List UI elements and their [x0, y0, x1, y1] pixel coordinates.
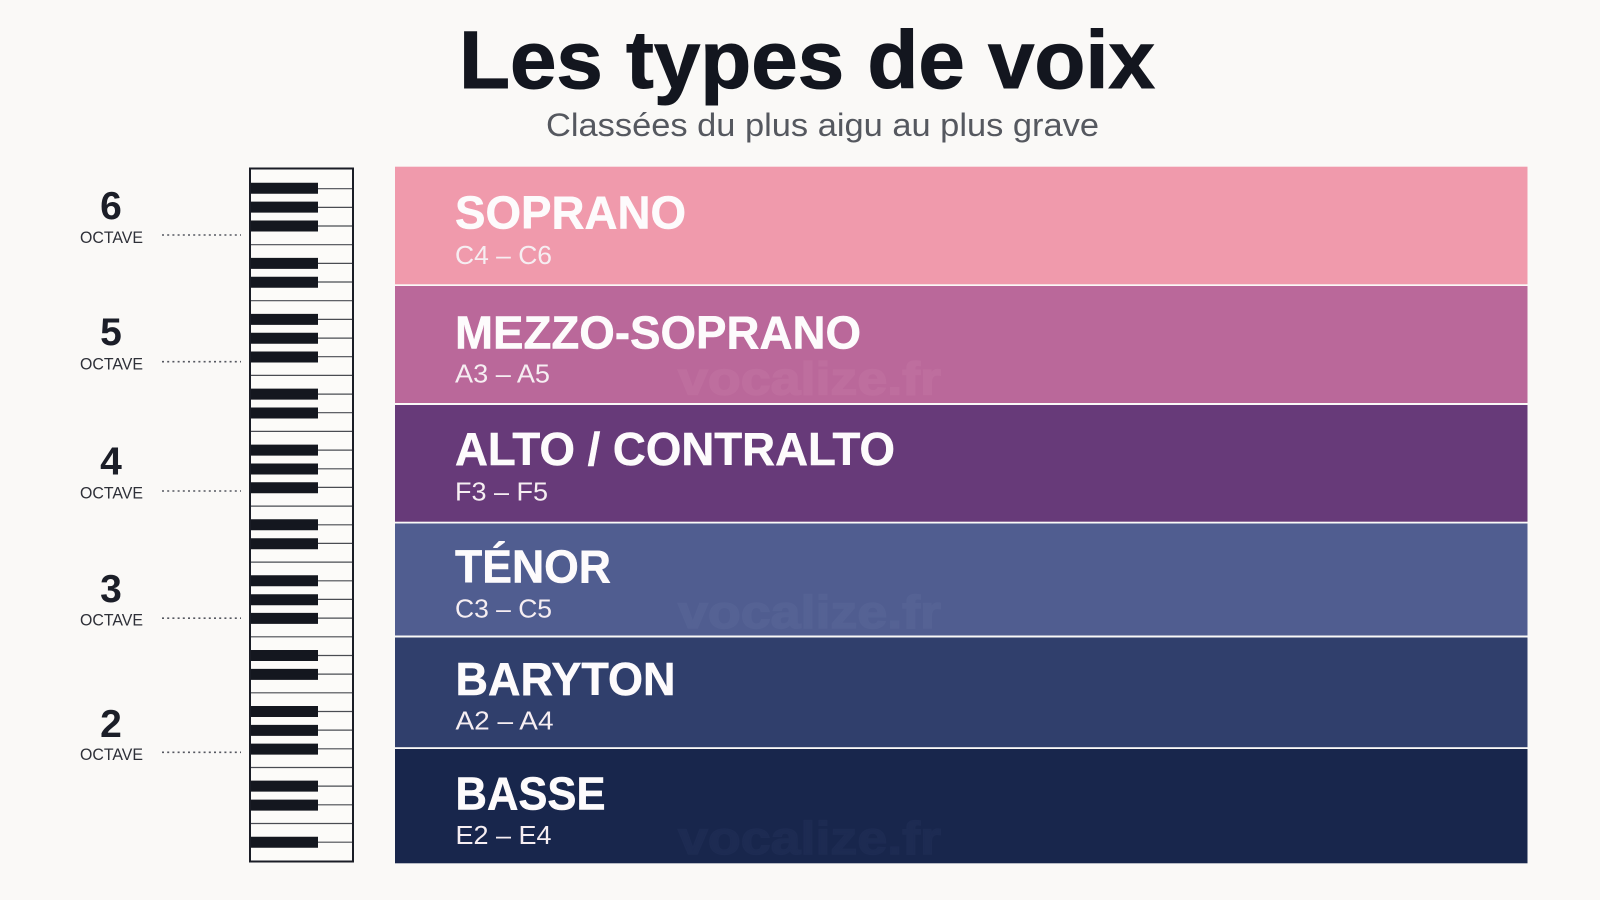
octave 3: 3 — [100, 568, 122, 611]
panel: ténor — [395, 524, 1528, 638]
octave labels — [80, 185, 241, 764]
panel: soprano — [395, 167, 1528, 284]
octave 4 — [80, 440, 241, 502]
octave 6: OCTAVE — [80, 228, 143, 247]
range: basse: E2 – E4 — [456, 820, 552, 850]
octave 3: OCTAVE — [80, 610, 143, 630]
name: baryton: BARYTON — [456, 653, 676, 705]
octave 6: 6 — [100, 185, 122, 228]
panel: basse — [395, 749, 1528, 864]
name: alto: ALTO / CONTRALTO — [455, 423, 895, 475]
octave 2: OCTAVE — [80, 745, 143, 764]
octave 4: OCTAVE — [80, 484, 143, 502]
title: Les types de voix — [459, 15, 1155, 106]
range: alto: F3 – F5 — [455, 477, 548, 507]
panel: alto — [395, 405, 1528, 522]
range: baryton: A2 – A4 — [456, 705, 554, 735]
watermark: vocalize.fr — [678, 812, 941, 864]
panel: baryton — [395, 638, 1528, 747]
octave 5: 5 — [100, 311, 122, 354]
octave 2 — [80, 703, 241, 764]
octave 2: 2 — [100, 703, 122, 746]
name: soprano: SOPRANO — [455, 186, 686, 238]
range: mezzo-soprano: A3 – A5 — [455, 359, 550, 389]
octave 3 — [80, 568, 241, 630]
name: ténor: TÉNOR — [455, 541, 611, 593]
name: mezzo-soprano: MEZZO-SOPRANO — [455, 306, 861, 358]
panel: mezzo-soprano — [395, 286, 1528, 404]
name: basse: BASSE — [456, 768, 606, 820]
octave 5: OCTAVE — [80, 354, 143, 374]
range: soprano: C4 – C6 — [455, 240, 552, 270]
subtitle: Classées du plus aigu au plus grave — [546, 107, 1099, 143]
octave 5 — [80, 311, 241, 374]
piano keyboard — [250, 168, 353, 862]
watermark: vocalize.fr — [678, 352, 941, 404]
range: ténor: C3 – C5 — [455, 594, 552, 624]
octave 6 — [80, 185, 241, 247]
watermark: vocalize.fr — [678, 586, 941, 638]
octave 4: 4 — [100, 440, 122, 484]
